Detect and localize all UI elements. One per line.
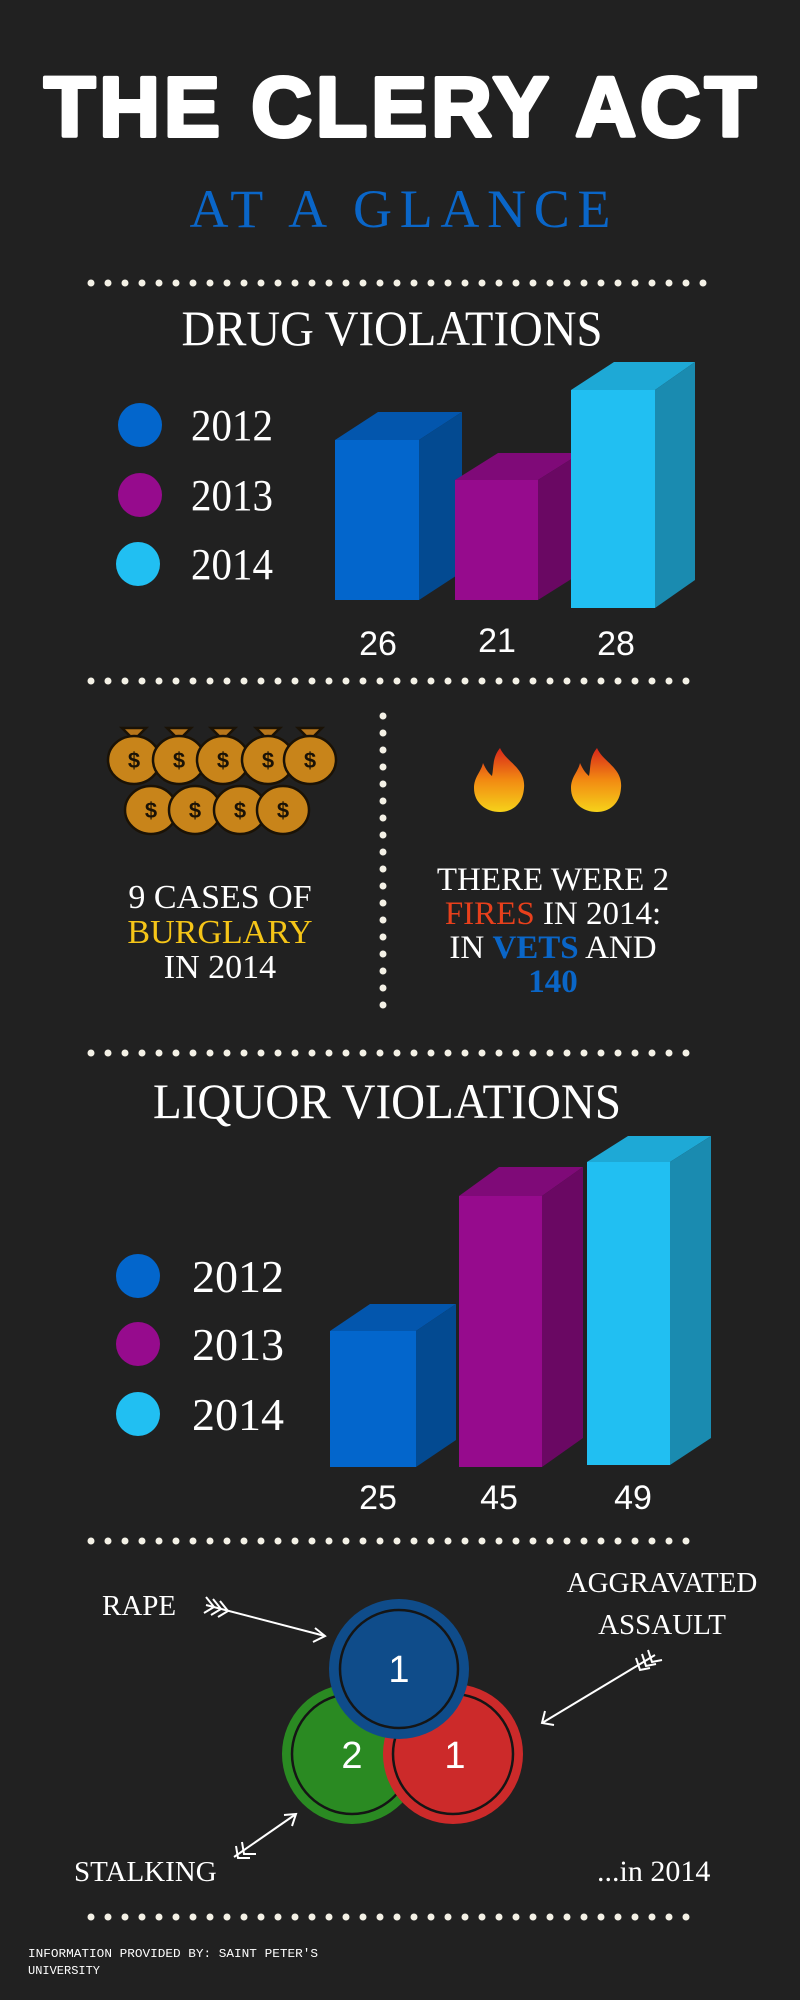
subtitle: AT A GLANCE (190, 179, 610, 239)
text: in 2014: ...in 2014 (597, 1855, 710, 1888)
legend: drug: 2013 (191, 471, 273, 520)
bar chart: drug violations (335, 362, 695, 663)
heading: drug violations: DRUG VIOLATIONS (182, 300, 602, 356)
label: aggravated assault with arrow: ASSAULT (598, 1609, 726, 1641)
icon: money bags: $ (173, 748, 185, 773)
venn diagram (282, 1599, 523, 1824)
label: rape with arrow (102, 1590, 325, 1642)
icon: money bags: $ (304, 748, 316, 773)
label: aggravated assault with arrow (542, 1567, 757, 1725)
text: fires: IN VETS AND (449, 930, 657, 966)
icon: money bags: $ (217, 748, 229, 773)
venn diagram: 1 (388, 1649, 410, 1691)
bar chart: liquor violations: 25 (359, 1479, 397, 1517)
legend: liquor (116, 1251, 284, 1440)
legend: drug: 2014 (191, 540, 273, 589)
text: burglary: BURGLARY (127, 914, 313, 951)
text: burglary (127, 879, 313, 986)
icon: money bags: $ (262, 748, 274, 773)
text: burglary: 9 CASES OF (128, 879, 312, 916)
legend: drug: 2012 (191, 401, 273, 450)
text: fires (437, 862, 669, 1000)
label: rape with arrow: RAPE (102, 1590, 176, 1622)
footer credit: INFORMATION PROVIDED BY: SAINT PETER'S (28, 1947, 318, 1961)
legend: liquor: 2012 (192, 1251, 284, 1302)
heading: liquor violations: LIQUOR VIOLATIONS (153, 1073, 621, 1129)
label: aggravated assault with arrow: AGGRAVATED (567, 1567, 757, 1599)
legend: liquor: 2013 (192, 1319, 284, 1370)
icon: money bags: $ (145, 798, 157, 823)
legend: drug (116, 401, 273, 589)
icon: money bags: $ (189, 798, 201, 823)
icon: fires (474, 748, 621, 812)
footer credit (28, 1947, 318, 1978)
icon: money bags: $ (128, 748, 140, 773)
label: stalking with arrow (74, 1814, 296, 1888)
bar chart: liquor violations (330, 1136, 711, 1517)
text: fires: FIRES IN 2014: (445, 896, 661, 932)
text: burglary: IN 2014 (164, 949, 276, 986)
text: fires: 140 (528, 964, 578, 1000)
bar chart: drug violations: 21 (478, 622, 516, 660)
icon: money bags: $ (277, 798, 289, 823)
bar chart: drug violations: 28 (597, 625, 635, 663)
bar chart: liquor violations: 49 (614, 1479, 652, 1517)
footer credit: UNIVERSITY (28, 1964, 100, 1978)
venn diagram: 2 (341, 1735, 363, 1777)
text: fires: THERE WERE 2 (437, 862, 669, 898)
venn diagram: 1 (444, 1735, 466, 1777)
title: THE CLERY ACT (44, 60, 756, 154)
icon: money bags: $ (234, 798, 246, 823)
legend: liquor: 2014 (192, 1389, 284, 1440)
bar chart: liquor violations: 45 (480, 1479, 518, 1517)
label: stalking with arrow: STALKING (74, 1856, 217, 1888)
icon: money bags (108, 728, 336, 834)
bar chart: drug violations: 26 (359, 625, 397, 663)
